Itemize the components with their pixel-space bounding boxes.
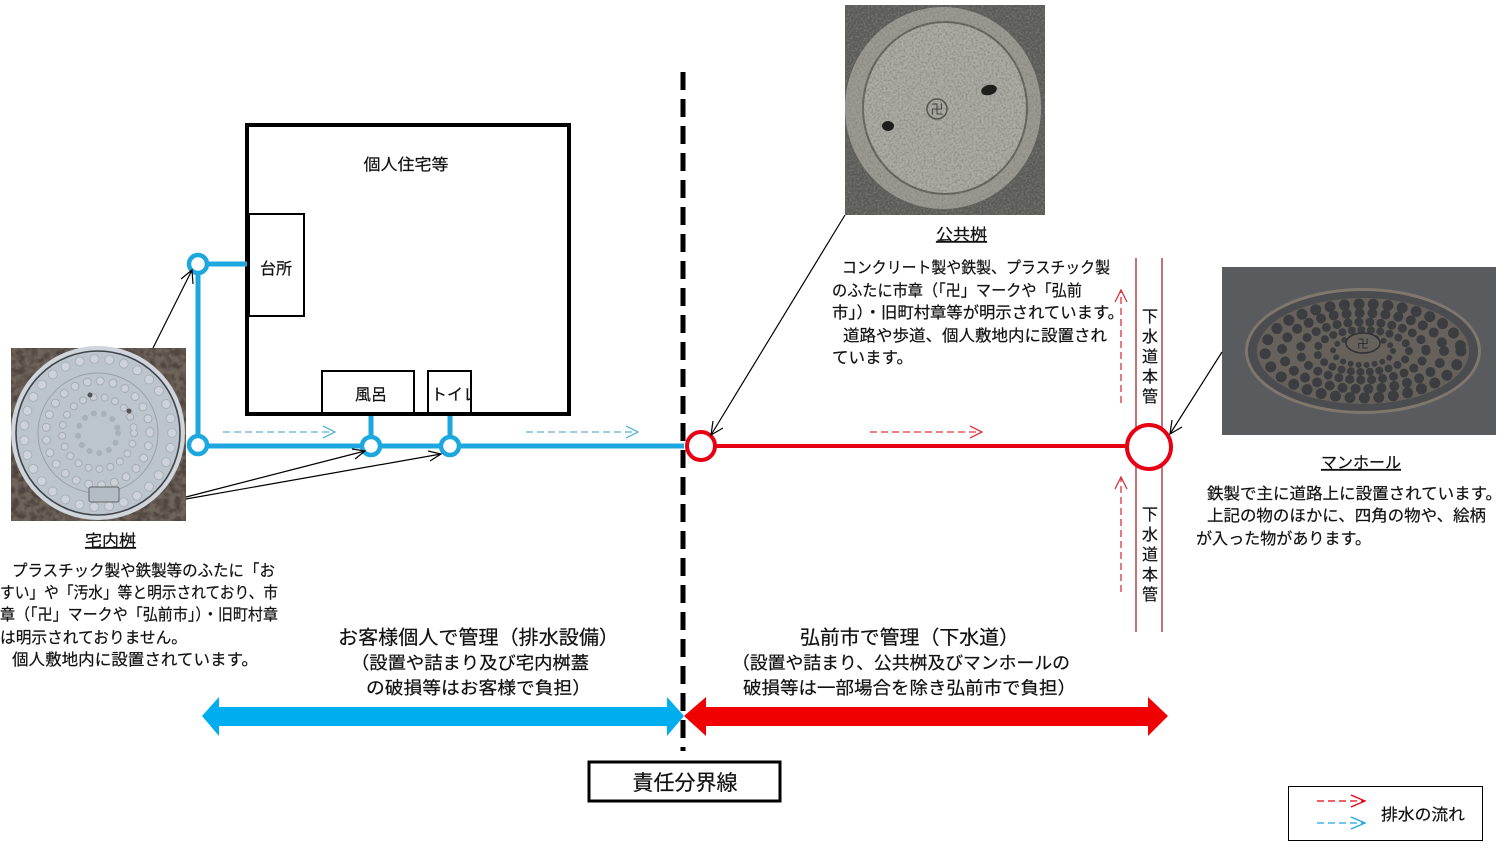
flow arrows xyxy=(223,290,1127,592)
private inlet description: 章（「卍」マークや「弘前市」）・旧町村章 xyxy=(0,606,278,624)
manhole description xyxy=(1196,485,1502,548)
boundary label box: 責任分界線 xyxy=(632,772,738,795)
callout arrows xyxy=(153,215,1222,499)
boundary label box xyxy=(589,762,780,801)
public inlet description: コンクリート製や鉄製、プラスチック製 xyxy=(842,259,1110,277)
private inlet description: は明示されておりません。 xyxy=(0,629,187,647)
city management heading: 弘前市で管理（下水道） xyxy=(800,627,1019,649)
sewer main label upper: 道 xyxy=(1142,348,1158,366)
blue drain pipes xyxy=(189,255,684,455)
photo: manhole cover: 卍 xyxy=(1357,337,1369,351)
room: bath: 風呂 xyxy=(355,387,387,404)
sewer main label lower: 水 xyxy=(1142,526,1158,544)
red sewer pipe xyxy=(687,425,1171,469)
customer management heading xyxy=(338,627,619,698)
public inlet description: ています。 xyxy=(832,349,913,367)
sewer main pipe lines xyxy=(1136,258,1162,632)
room: toilet xyxy=(427,370,472,412)
red responsibility double arrow xyxy=(684,697,1168,736)
photo: public inlet cover xyxy=(845,5,1045,215)
public inlet node xyxy=(687,432,715,460)
photo: private inlet cover xyxy=(11,346,186,521)
customer management heading: お客様個人で管理（排水設備） xyxy=(338,627,619,649)
sewer main label lower: 本 xyxy=(1142,566,1158,584)
customer management heading: （設置や詰まり及び宅内桝蓋 xyxy=(351,653,589,673)
customer management heading: の破損等はお客様で負担） xyxy=(366,678,591,698)
private inlet description: すい」や「汚水」等と明示されており、市 xyxy=(0,584,278,602)
manhole description: が入った物があります。 xyxy=(1196,530,1371,548)
house label: 個人住宅等 xyxy=(364,156,448,174)
city management heading: 破損等は一部場合を除き弘前市で負担） xyxy=(743,678,1076,698)
sewer main label upper: 本 xyxy=(1142,368,1158,386)
private inlet description xyxy=(0,562,278,669)
manhole description: 上記の物のほかに、四角の物や、絵柄 xyxy=(1207,507,1486,525)
sewer main label lower: 道 xyxy=(1142,546,1158,564)
sewer main label upper: 水 xyxy=(1142,328,1158,346)
private inlet description: 個人敷地内に設置されています。 xyxy=(12,650,258,669)
city management heading xyxy=(732,627,1076,698)
manhole description: 鉄製で主に道路上に設置されています。 xyxy=(1207,485,1502,503)
inlet node: corner xyxy=(189,436,207,454)
public inlet description: 市」）・旧町村章等が明示されています。 xyxy=(832,304,1124,322)
legend: 排水の流れ xyxy=(1381,806,1465,824)
room: kitchen: 台所 xyxy=(260,260,292,278)
responsibility boundary line xyxy=(680,72,686,751)
house outline xyxy=(247,125,569,414)
public inlet description: のふたに市章（「卍」マークや「弘前 xyxy=(832,282,1082,300)
room: bath xyxy=(322,371,414,413)
sewer main label lower: 下 xyxy=(1142,507,1158,524)
blue responsibility double arrow xyxy=(202,697,684,736)
city management heading: （設置や詰まり、公共桝及びマンホールの xyxy=(732,653,1070,673)
public inlet description xyxy=(832,259,1124,367)
private inlet title: 宅内桝 xyxy=(85,532,136,550)
room: kitchen xyxy=(249,214,304,316)
sewer main label lower xyxy=(1142,507,1158,604)
manhole title: マンホール xyxy=(1321,455,1401,472)
inlet node: bath xyxy=(362,437,380,455)
legend xyxy=(1288,786,1482,840)
sewer main label lower: 管 xyxy=(1142,586,1158,604)
inlet node: kitchen xyxy=(189,255,207,273)
sewer main label upper: 下 xyxy=(1142,309,1158,326)
manhole node xyxy=(1127,425,1171,469)
photo: public inlet cover: 卍 xyxy=(930,102,944,117)
inlet node: toilet xyxy=(441,437,459,455)
public inlet description: 道路や歩道、個人敷地内に設置され xyxy=(843,326,1107,345)
photo: manhole cover xyxy=(1222,267,1496,435)
room: toilet: トイレ xyxy=(431,387,479,404)
sewer main label upper xyxy=(1142,309,1158,406)
public inlet title: 公共桝 xyxy=(936,226,987,244)
sewer main label upper: 管 xyxy=(1142,388,1158,406)
private inlet description: プラスチック製や鉄製等のふたに「お xyxy=(12,562,275,580)
